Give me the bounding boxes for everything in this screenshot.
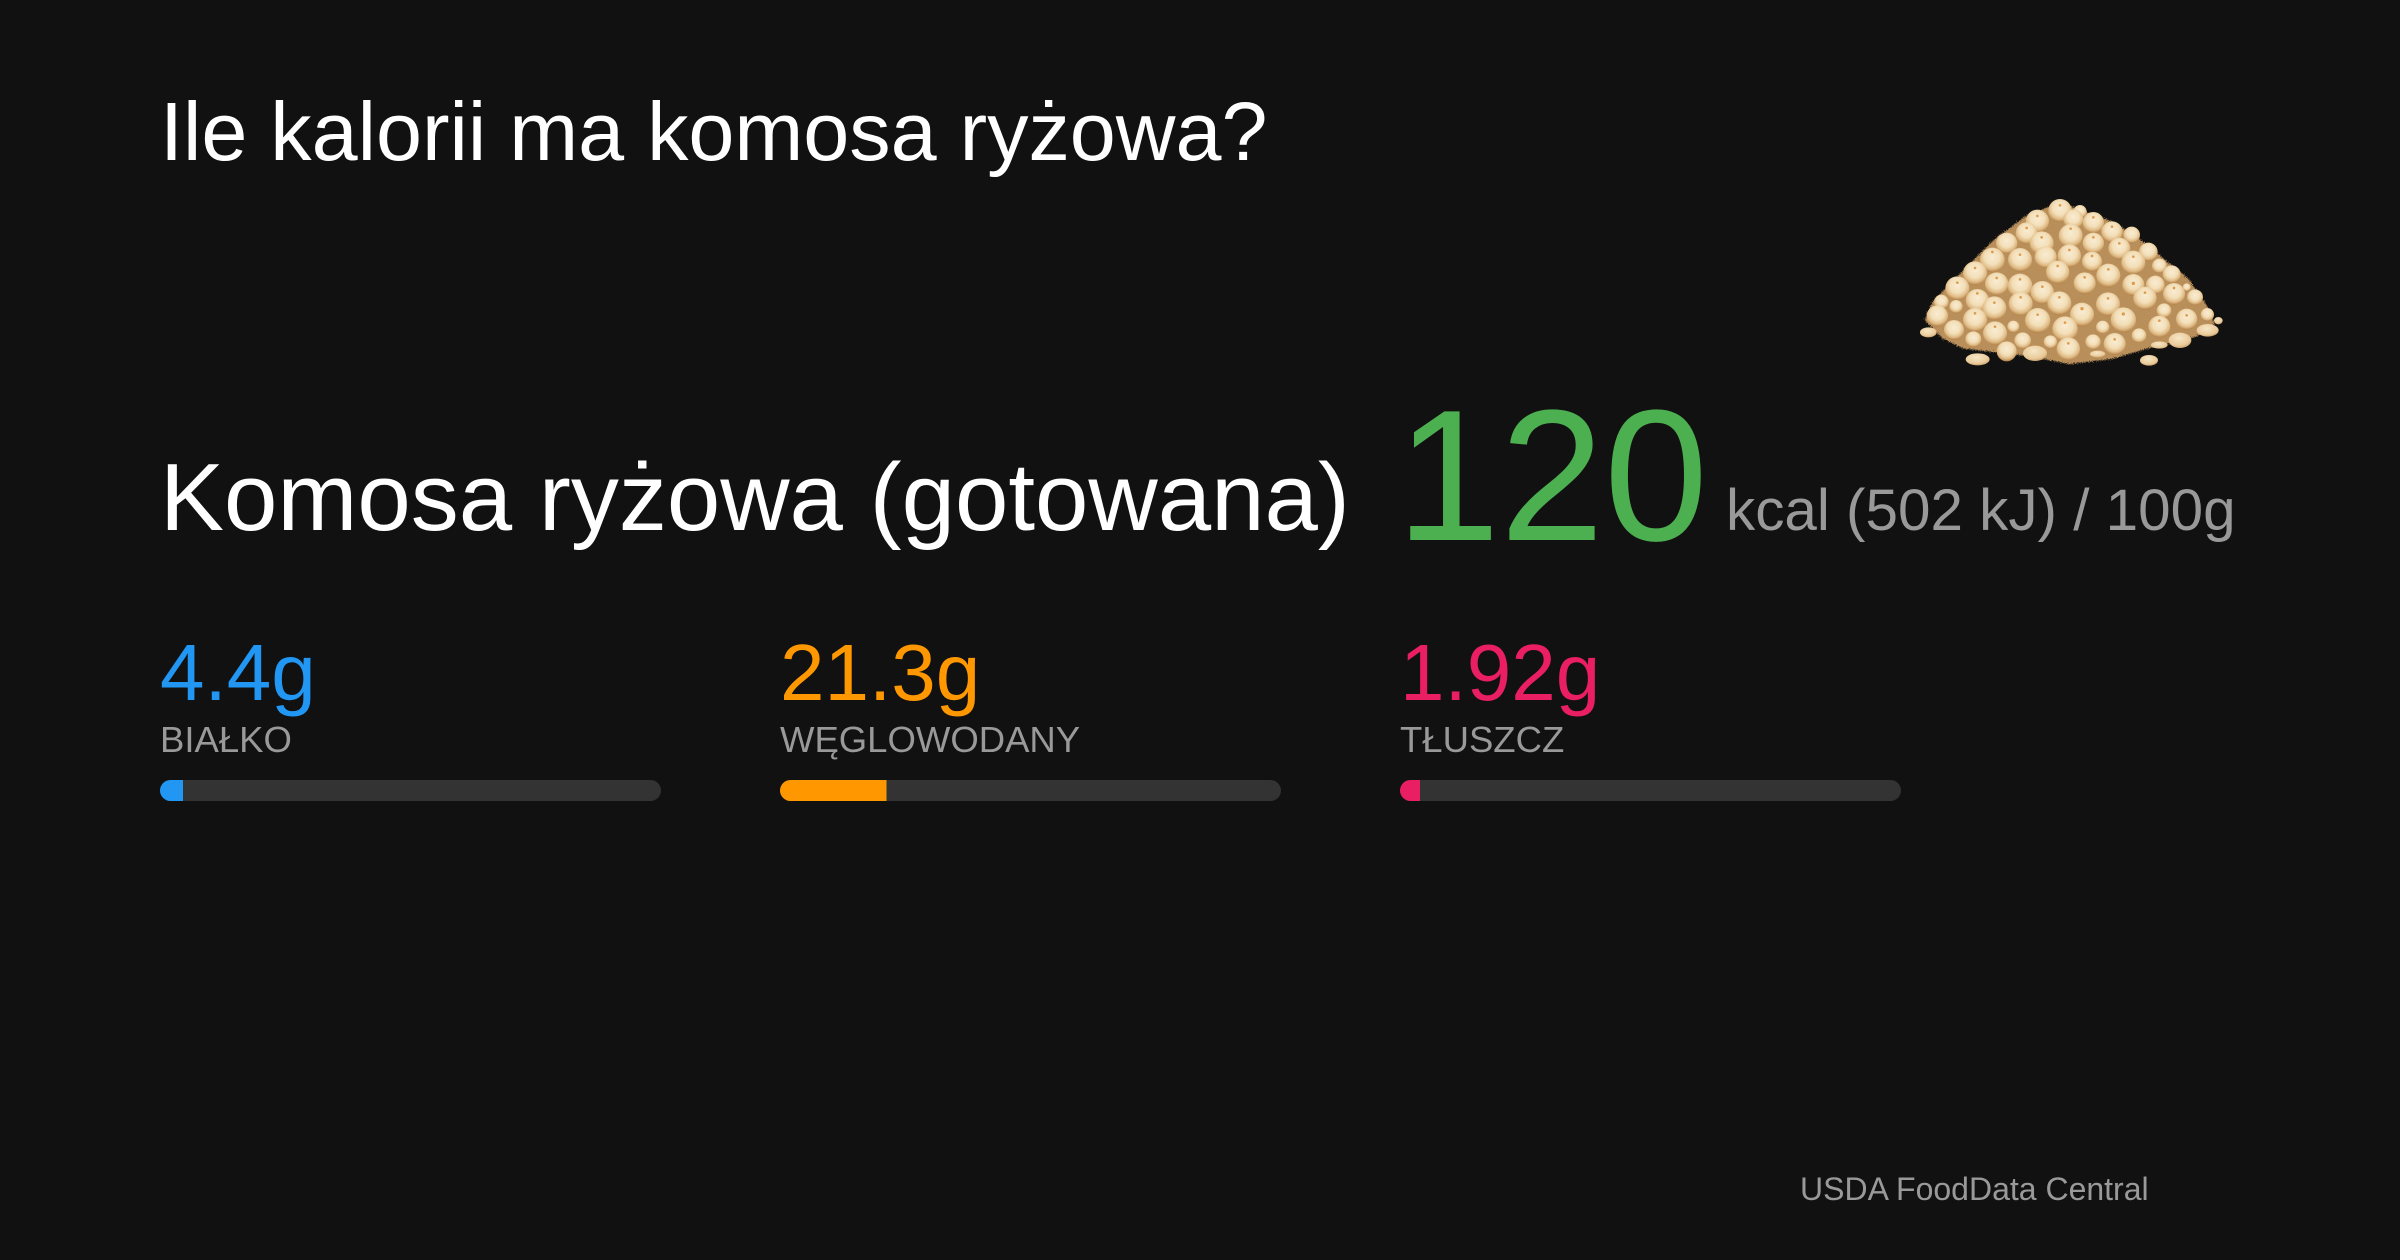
food name: Komosa ryżowa (gotowana)	[160, 444, 1350, 551]
protein label: BIAŁKO	[160, 719, 292, 760]
carbohydrates bar track	[780, 780, 1281, 801]
icon: quinoa pile	[1920, 199, 2223, 366]
fat label: TŁUSZCZ	[1400, 719, 1564, 760]
fat bar track	[1400, 780, 1901, 801]
source: USDA FoodData Central	[1800, 1171, 2149, 1207]
title: Ile kalorii ma komosa ryżowa?	[160, 85, 1267, 178]
carbohydrates value: 21.3g	[780, 628, 980, 717]
protein bar fill	[160, 780, 183, 801]
fat bar fill	[1400, 780, 1420, 801]
macro: protein	[160, 628, 661, 801]
protein value: 4.4g	[160, 628, 316, 717]
carbohydrates label: WĘGLOWODANY	[780, 719, 1080, 760]
calorie unit: kcal (502 kJ) / 100g	[1726, 478, 2236, 543]
calorie value: 120	[1396, 371, 1708, 580]
protein bar track	[160, 780, 661, 801]
carbohydrates bar fill	[780, 780, 886, 801]
macro: fat	[1400, 628, 1901, 801]
fat value: 1.92g	[1400, 628, 1600, 717]
macro: carbohydrates	[780, 628, 1281, 801]
